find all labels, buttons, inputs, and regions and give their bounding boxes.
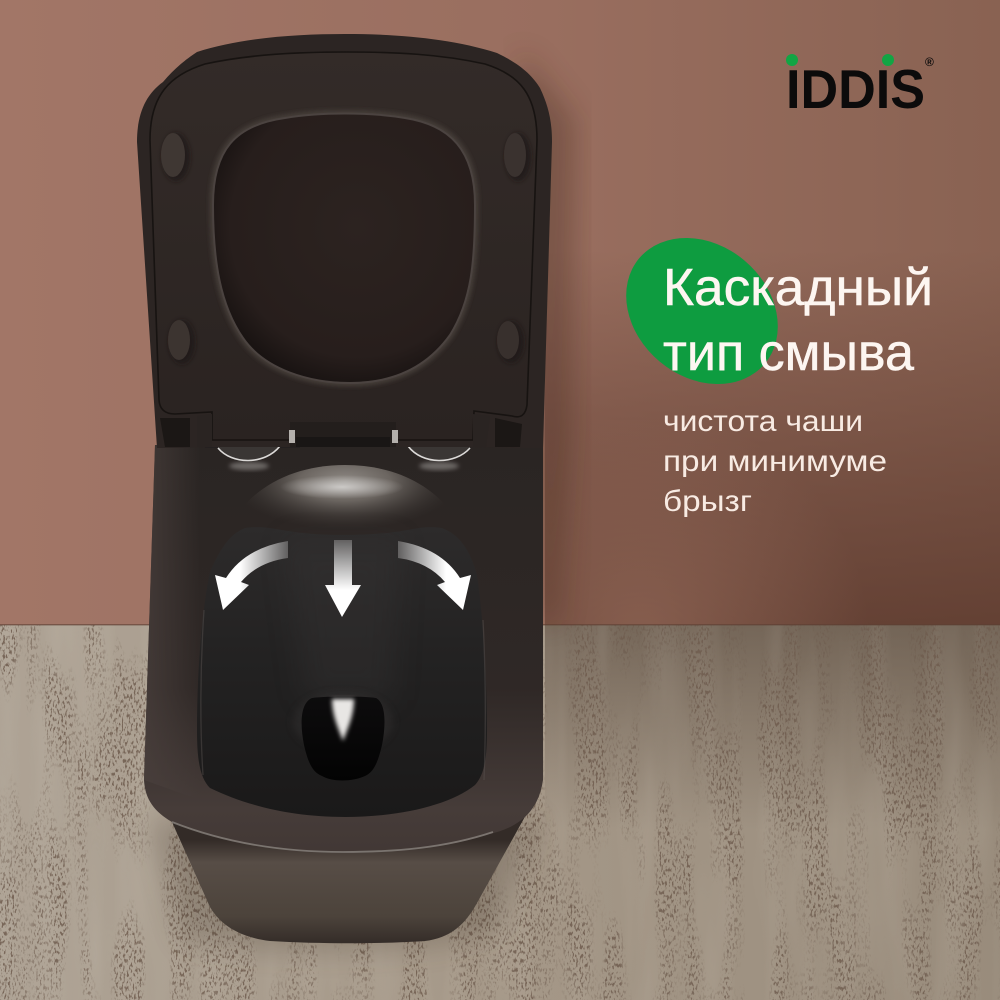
arrow: right <box>398 541 471 610</box>
drain opening <box>293 692 393 780</box>
shadow behind toilet <box>150 50 575 951</box>
toilet body: lower ceramic part <box>172 813 527 943</box>
hinge pins <box>289 430 295 443</box>
rear shelf highlight <box>225 465 465 535</box>
headline: тип смыва <box>663 324 914 382</box>
floor background <box>0 624 1000 1000</box>
bowl rim surface <box>144 445 543 853</box>
toilet bowl <box>144 445 543 853</box>
headline: Каскадный <box>663 259 933 317</box>
logo: IDDIS: IDDIS <box>786 58 925 120</box>
arrow: centre <box>325 540 361 617</box>
bumper: top right <box>504 133 531 181</box>
subheading text: при минимуме <box>663 445 887 478</box>
rim highlight <box>172 822 493 852</box>
lower hinge corners <box>160 418 522 447</box>
headline <box>663 259 933 382</box>
arrow: left <box>215 541 288 610</box>
green blob accent <box>597 208 807 414</box>
bumper: bottom left <box>168 320 195 364</box>
bumper: top left <box>161 133 190 181</box>
lid outer rim <box>137 34 552 448</box>
flush arrows <box>215 540 471 617</box>
back wall light cone <box>285 540 400 700</box>
seat opening soft ring <box>213 114 475 383</box>
lid inner plate <box>150 52 537 440</box>
logo: IDDIS: ® <box>925 55 934 69</box>
interior inner side lines <box>201 610 485 780</box>
wall background <box>0 0 1000 626</box>
raised toilet seat lid <box>137 34 552 448</box>
hinges and chrome buffers <box>205 440 470 470</box>
seat opening panel <box>213 114 475 383</box>
subheading text: чистота чаши <box>663 405 863 438</box>
bowl interior <box>197 527 487 817</box>
hinge bridge <box>290 422 396 447</box>
bumper: bottom right <box>497 321 524 363</box>
subheading text <box>663 405 887 518</box>
subheading text: брызг <box>663 485 752 518</box>
